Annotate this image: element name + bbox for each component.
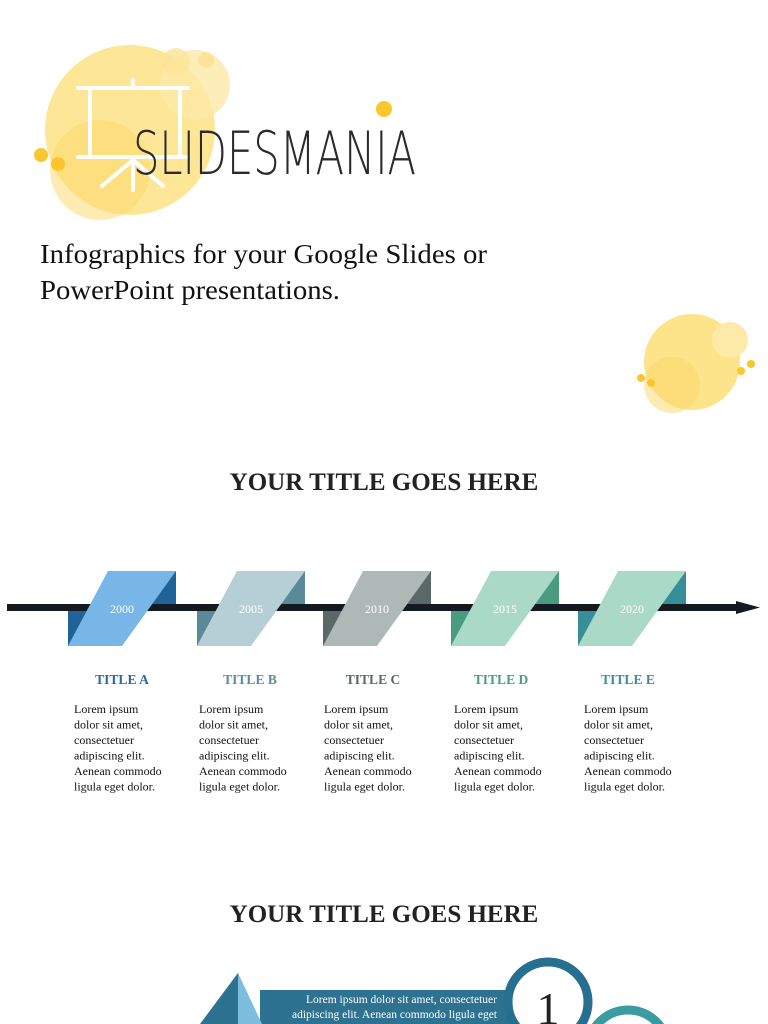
timeline titles: TITLE D (474, 672, 528, 687)
subtitle text (40, 239, 487, 305)
icon: presentation board (78, 80, 188, 190)
timeline: 2005 (239, 602, 263, 616)
timeline titles (95, 672, 655, 687)
logo (34, 45, 416, 220)
timeline texts (74, 702, 672, 794)
timeline titles: TITLE E (601, 672, 655, 687)
title 2: YOUR TITLE GOES HERE (230, 901, 538, 928)
timeline: 2015 (493, 602, 517, 616)
subtitle text: PowerPoint presentations. (40, 275, 340, 305)
bottom graphic: adipiscing elit. Aenean commodo ligula eget (292, 1009, 498, 1021)
timeline titles: TITLE C (346, 672, 400, 687)
bottom graphic: Lorem ipsum dolor sit amet, consectetuer (306, 994, 497, 1006)
timeline: 2010 (365, 602, 389, 616)
timeline: 2000 (110, 602, 134, 616)
decorative yellow circle (637, 314, 755, 413)
timeline titles: TITLE A (95, 672, 149, 687)
timeline: 2020 (620, 602, 644, 616)
timeline (7, 571, 760, 646)
timeline titles: TITLE B (223, 672, 277, 687)
bottom graphic (200, 962, 668, 1024)
title 1: YOUR TITLE GOES HERE (230, 469, 538, 496)
logo: SLIDESMANIA (133, 119, 416, 189)
subtitle text: Infographics for your Google Slides or (40, 239, 487, 269)
